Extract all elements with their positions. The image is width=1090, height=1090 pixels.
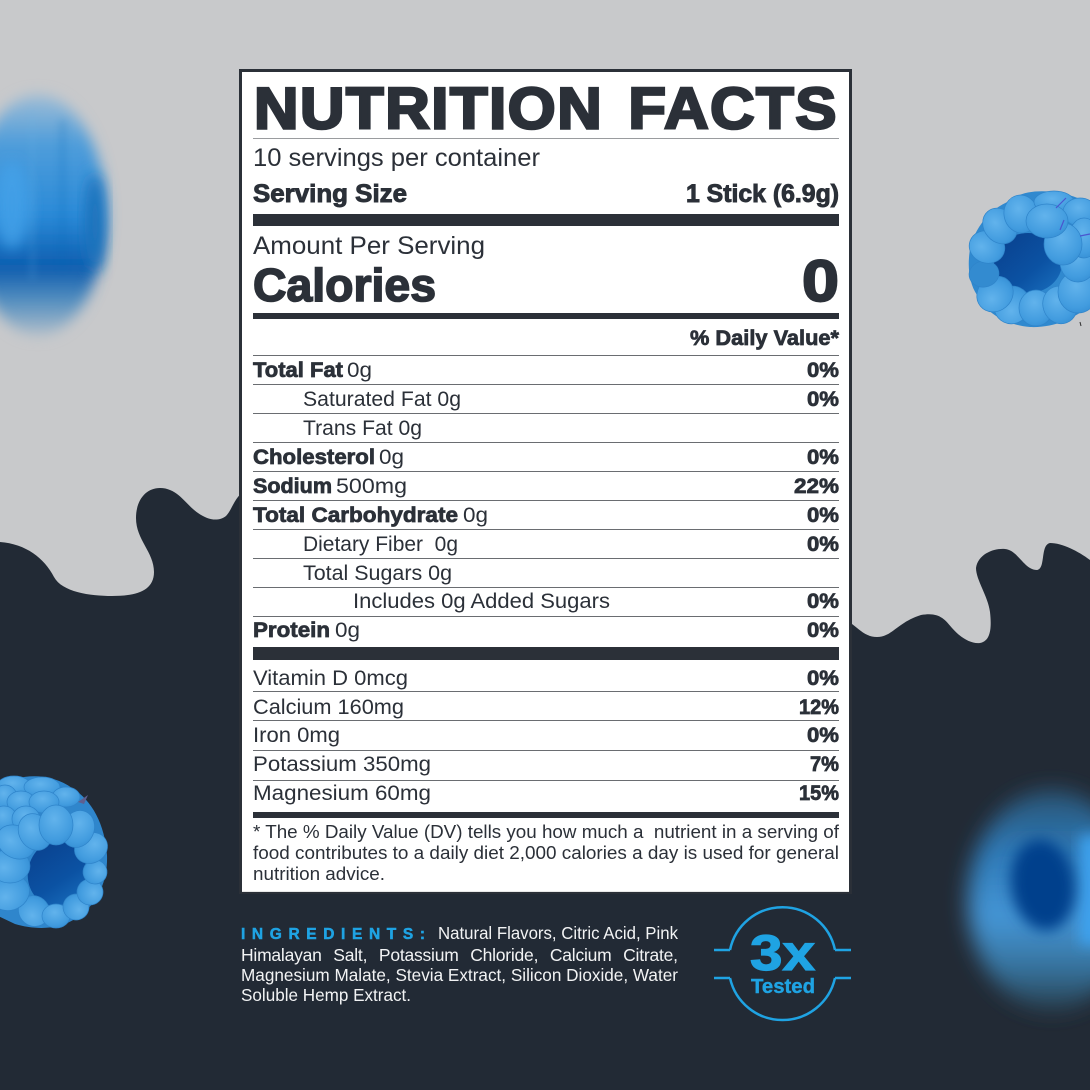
row: vitamin d bbox=[253, 666, 839, 690]
heading: nutrition facts: NUTRITION FACTS bbox=[254, 76, 838, 142]
row: sodium: 500mg bbox=[336, 474, 407, 498]
row: dietary fiber: 0% bbox=[807, 532, 839, 556]
row: calcium: 12% bbox=[799, 695, 839, 719]
panel: nutrition facts label bbox=[240, 70, 850, 892]
row: total carbohydrate bbox=[253, 503, 839, 527]
row: calcium bbox=[253, 695, 839, 719]
footnote: nutrition advice. bbox=[253, 863, 385, 884]
row: vitamin d: 0% bbox=[807, 666, 839, 690]
row: potassium: 7% bbox=[810, 752, 839, 776]
blurred raspberry: bottom right bbox=[968, 790, 1090, 1010]
daily value header: % Daily Value* bbox=[690, 326, 840, 350]
ingredients text: Natural Flavors, Citric Acid, Pink bbox=[438, 923, 678, 943]
row: sodium: 22% bbox=[794, 474, 839, 498]
calories row: Calories bbox=[253, 259, 436, 311]
background: dark dripping wave bbox=[0, 488, 1090, 1090]
row: sodium: Sodium bbox=[253, 474, 332, 498]
ingredients text bbox=[241, 923, 678, 1005]
footnote bbox=[253, 821, 840, 884]
row: cholesterol: Cholesterol bbox=[253, 445, 375, 469]
row: saturated fat: 0% bbox=[807, 387, 839, 411]
row: iron: Iron 0mg bbox=[253, 723, 340, 747]
row: saturated fat: Saturated Fat 0g bbox=[303, 387, 461, 411]
row: trans fat: Trans Fat 0g bbox=[303, 416, 422, 440]
raspberry: top right bbox=[965, 191, 1090, 330]
ingredients text: Soluble Hemp Extract. bbox=[241, 985, 411, 1005]
footnote: * The % Daily Value (DV) tells you how much a nutrient in a serving of bbox=[253, 821, 840, 842]
row: total fat: 0g bbox=[347, 358, 372, 382]
row: potassium: Potassium 350mg bbox=[253, 752, 431, 776]
serving size row bbox=[253, 180, 839, 208]
row: iron: 0% bbox=[807, 723, 839, 747]
row: protein: 0% bbox=[807, 618, 839, 642]
row: dietary fiber bbox=[303, 532, 839, 556]
row: added sugars bbox=[353, 589, 839, 613]
row: saturated fat bbox=[303, 387, 839, 411]
row: protein: Protein bbox=[253, 618, 330, 642]
row: cholesterol: 0g bbox=[379, 445, 404, 469]
row: iron bbox=[253, 723, 839, 747]
blurred raspberry: top left bbox=[0, 95, 106, 335]
row: vitamin d: Vitamin D 0mcg bbox=[253, 666, 408, 690]
calories row bbox=[253, 249, 839, 314]
badge: 3x tested: 3x bbox=[750, 925, 815, 981]
servings per container: 10 servings per container bbox=[253, 144, 540, 172]
serving size row: 1 Stick (6.9g) bbox=[686, 180, 839, 208]
row: magnesium: Magnesium 60mg bbox=[253, 781, 431, 805]
row: protein: 0g bbox=[335, 618, 360, 642]
amount per serving: Amount Per Serving bbox=[253, 232, 485, 260]
row: added sugars: 0% bbox=[807, 589, 839, 613]
row: total carbohydrate: 0% bbox=[807, 503, 839, 527]
footnote: food contributes to a daily diet 2,000 calories a day is used for general bbox=[253, 842, 839, 863]
ingredients text: Magnesium Malate, Stevia Extract, Silicon Dioxide, Water bbox=[241, 965, 678, 985]
badge: 3x tested bbox=[714, 907, 851, 1020]
serving size row: Serving Size bbox=[253, 180, 407, 208]
ingredients text: Himalayan Salt, Potassium Chloride, Calcium Citrate, bbox=[241, 945, 678, 965]
raspberry: bottom left bbox=[0, 776, 113, 933]
row: protein bbox=[253, 618, 839, 642]
row: added sugars: Includes 0g Added Sugars bbox=[353, 589, 610, 613]
row: total sugars: Total Sugars 0g bbox=[303, 561, 452, 585]
badge: 3x tested: Tested bbox=[751, 976, 815, 998]
row: total fat: Total Fat bbox=[253, 358, 343, 382]
row: cholesterol: 0% bbox=[807, 445, 839, 469]
ingredients text: INGREDIENTS: bbox=[241, 926, 425, 943]
row: sodium bbox=[253, 474, 839, 498]
row: potassium bbox=[253, 752, 839, 776]
row: total fat: 0% bbox=[807, 358, 839, 382]
row: total carbohydrate: Total Carbohydrate bbox=[253, 503, 458, 527]
row: total carbohydrate: 0g bbox=[463, 503, 488, 527]
row: magnesium bbox=[253, 781, 839, 805]
row: magnesium: 15% bbox=[799, 781, 839, 805]
calories row: 0 bbox=[802, 249, 839, 314]
row: cholesterol bbox=[253, 445, 839, 469]
row: calcium: Calcium 160mg bbox=[253, 695, 404, 719]
row: dietary fiber: Dietary Fiber 0g bbox=[303, 532, 458, 556]
row: total fat bbox=[253, 358, 839, 382]
